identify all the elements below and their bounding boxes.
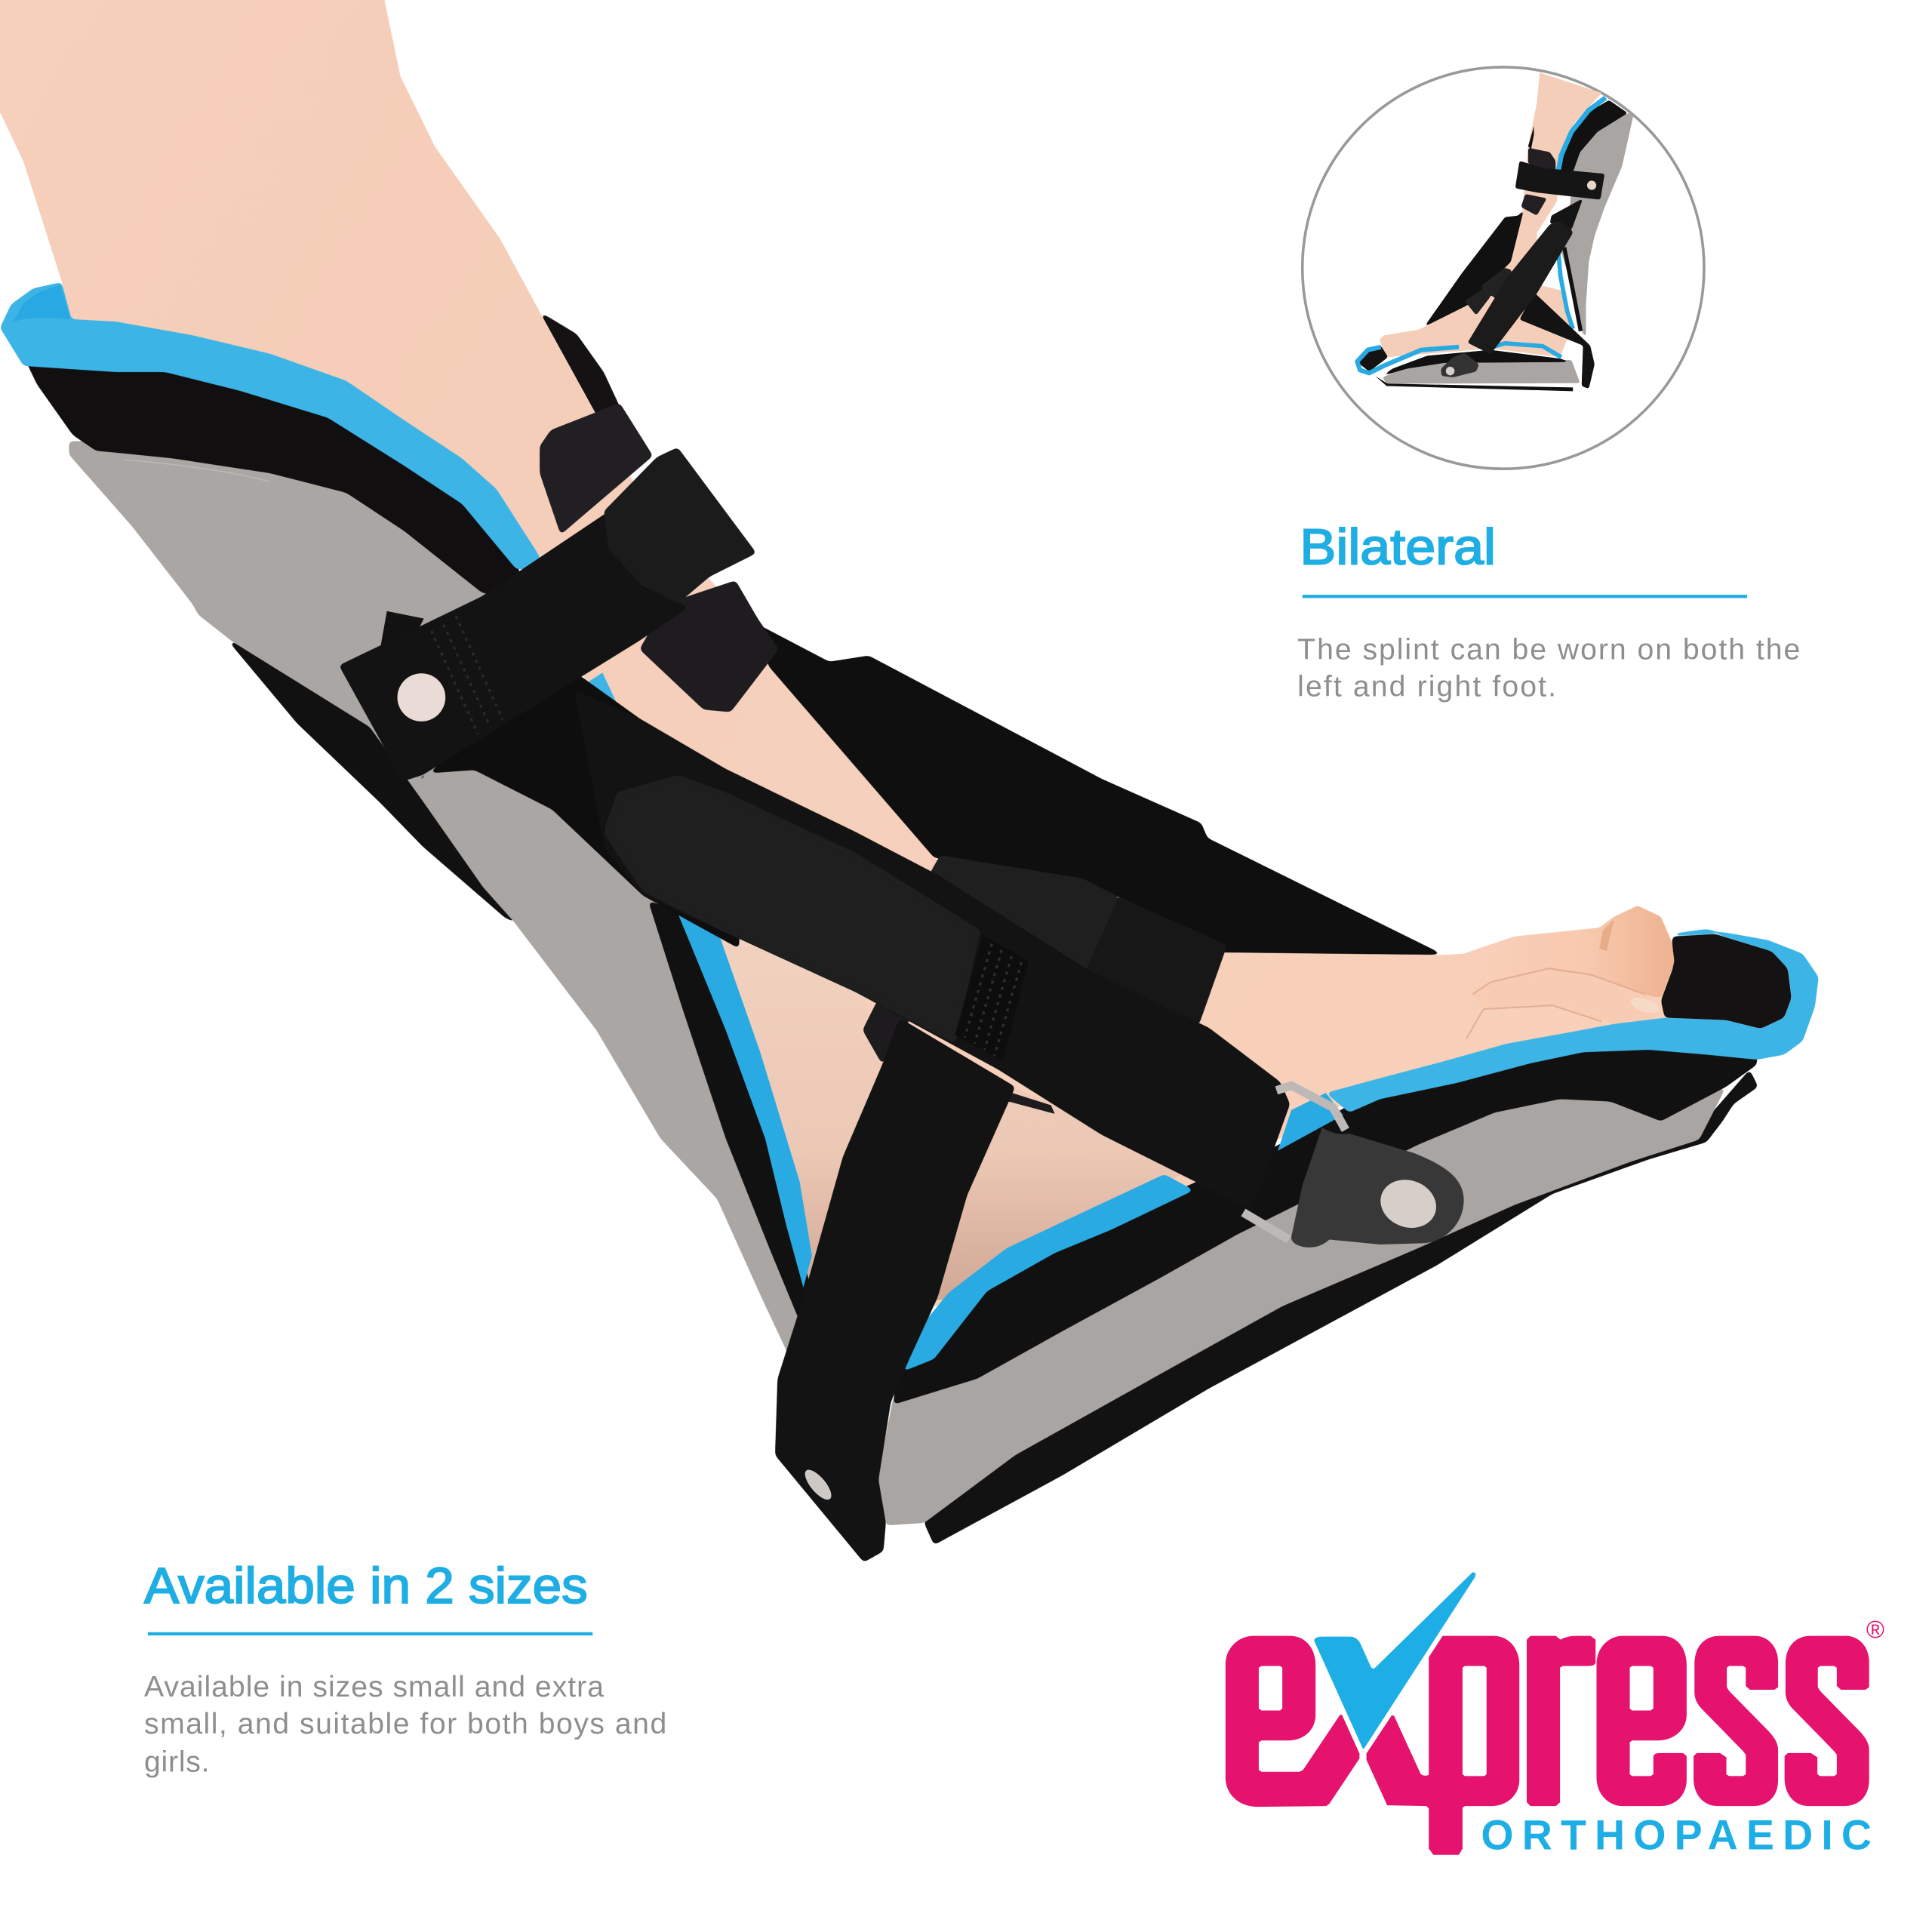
blue fold at cuff — [12, 285, 70, 323]
blue fragment under ankle strap — [586, 672, 620, 709]
blue fragment behind buckle — [1278, 1093, 1343, 1151]
mini upper blue rim — [1558, 98, 1605, 170]
underline — [148, 1633, 592, 1635]
check mark — [1314, 1572, 1476, 1749]
heel blue foam strip — [678, 913, 812, 1287]
vertical heel strap — [775, 1018, 1015, 1562]
letter s, second — [1785, 1636, 1869, 1806]
lower calf outer black pad — [228, 641, 542, 921]
mini sole lining — [1383, 350, 1571, 376]
big toe — [1464, 906, 1675, 998]
upper ankle strap — [339, 512, 689, 781]
letter r — [1527, 1636, 1595, 1806]
circle outline — [1303, 67, 1704, 469]
upper dark ankle pad — [540, 403, 653, 535]
mini cross strap — [1519, 292, 1595, 389]
buckle upper ring — [1276, 1085, 1346, 1130]
wordmark shapes — [1226, 1572, 1869, 1855]
perforated band — [955, 935, 1029, 1061]
ankle strap perforations — [431, 616, 503, 734]
mini grey sole — [1383, 360, 1580, 383]
dark patch right of heel strap — [1004, 1091, 1055, 1114]
midfoot strap flap — [929, 855, 1118, 974]
sole blue rim near heel — [903, 1174, 1194, 1371]
toe cup black inner — [1661, 934, 1792, 1029]
heel dark patch under strap — [863, 1001, 912, 1065]
registered mark: ® — [1866, 1615, 1884, 1643]
underline — [1303, 595, 1747, 598]
mini grey shell — [1560, 113, 1634, 337]
toe creases — [1466, 968, 1645, 1038]
description: The splint can be worn on both the — [1297, 633, 1800, 666]
mini heel lining — [1564, 248, 1581, 331]
upper ankle strap flap — [604, 448, 756, 604]
second toenail — [1629, 995, 1661, 1017]
lower dark ankle pad — [639, 580, 779, 712]
second letter e — [1596, 1636, 1687, 1806]
grey shell: calf and heel — [69, 441, 811, 1358]
letters x and p — [1367, 1636, 1519, 1855]
rear calf pad behind leg — [540, 312, 629, 444]
upper black lining — [23, 356, 528, 604]
callout: bilateral — [1297, 519, 1800, 703]
mini upper lining — [1558, 100, 1628, 172]
second toe — [1472, 968, 1663, 1024]
mini buckle — [1441, 352, 1479, 377]
mini ankle pads — [1521, 148, 1555, 216]
base black sole — [924, 1069, 1758, 1545]
callout: sizes — [144, 1558, 666, 1779]
midfoot strap under-piece — [1084, 897, 1227, 1025]
buckle plate — [1291, 1128, 1464, 1247]
mini snap — [1587, 180, 1596, 190]
ankle strap snap — [398, 673, 445, 721]
mini velcro — [1550, 198, 1583, 230]
mini skin — [1380, 72, 1601, 357]
forefoot blue foam rim — [1326, 929, 1819, 1112]
grey shell highlight — [123, 460, 270, 481]
top-of-foot tongue pad — [754, 622, 1444, 955]
miniature splint — [1356, 72, 1634, 391]
mini forefoot blue rim — [1357, 347, 1459, 373]
mini rivet — [1446, 367, 1454, 375]
grey sole plate — [877, 1087, 1726, 1525]
leg and foot skin — [0, 0, 1675, 1306]
logo: express orthopaedic — [1226, 1572, 1884, 1859]
main product photo: foot in night splint — [0, 0, 1819, 1562]
fuzzy velcro under long strap — [413, 672, 740, 949]
orthopaedic wordmark: ORTHOPAEDIC — [1481, 1812, 1872, 1859]
mini sole base — [1375, 376, 1573, 391]
heading: Available in 2 sizes — [144, 1558, 588, 1614]
inset circle: side view of splint — [1303, 67, 1704, 469]
description: small, and suitable for both boys and — [144, 1708, 666, 1740]
upper ankle strap tab — [380, 611, 424, 653]
heel strap snap — [801, 1466, 835, 1503]
buckle lower ring — [1243, 1213, 1289, 1239]
long forefoot strap — [574, 690, 1290, 1210]
mini long strap — [1468, 221, 1573, 354]
mini sole blue rim — [1492, 343, 1561, 357]
description: girls. — [144, 1746, 210, 1779]
heel black lining — [648, 900, 811, 1324]
upper blue foam rim — [0, 282, 545, 569]
velcro panel on long strap — [605, 775, 981, 1044]
heel skin shading — [709, 918, 1189, 1300]
mini ankle strap — [1515, 161, 1604, 200]
mini tongue — [1424, 210, 1524, 327]
letter s — [1694, 1636, 1778, 1806]
mini toe cup — [1356, 346, 1388, 371]
mini heel blue strip — [1558, 253, 1573, 329]
mini midfoot pads — [1465, 268, 1512, 315]
mini rear pad — [1528, 126, 1534, 149]
sole black lining — [894, 1042, 1757, 1404]
buckle rivet — [1374, 1172, 1443, 1235]
description: Available in sizes small and extra — [144, 1671, 604, 1703]
toes — [1464, 906, 1675, 1038]
description: left and right foot. — [1297, 670, 1556, 703]
toenail — [1599, 919, 1614, 951]
letter e — [1226, 1636, 1359, 1807]
heading: Bilateral — [1300, 519, 1496, 576]
